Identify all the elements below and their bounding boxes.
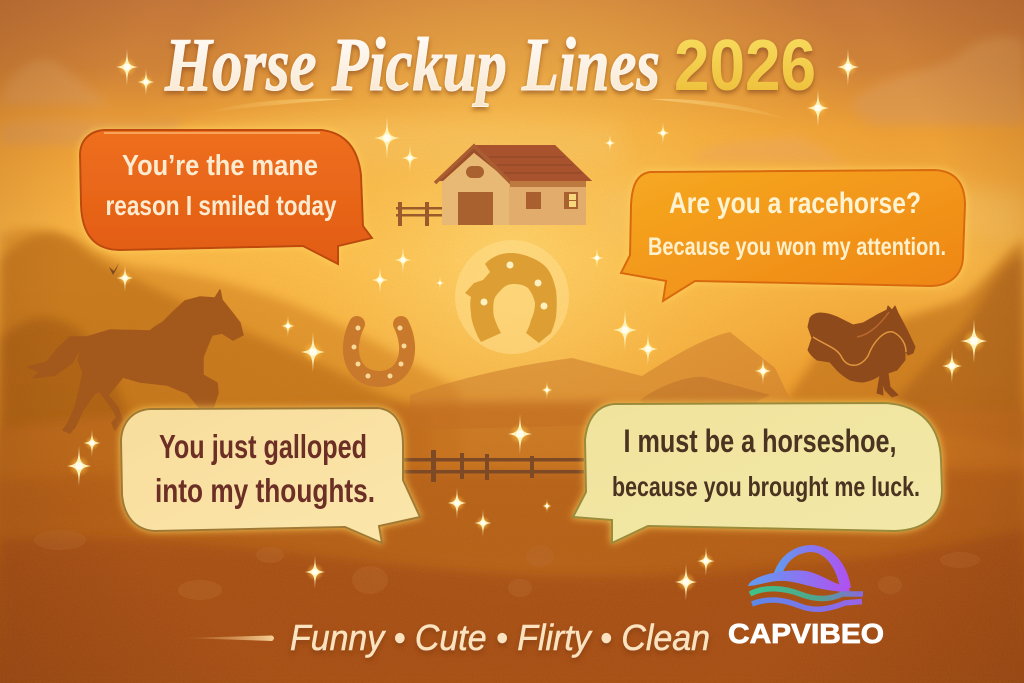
- distant hills: [0, 228, 1024, 520]
- speech bubble: galloped: [121, 408, 420, 543]
- speech bubble: racehorse: [621, 170, 965, 301]
- icon: large horseshoe with halo: [455, 240, 569, 354]
- icon: running horse silhouette: [28, 290, 243, 433]
- barn fence: [396, 202, 443, 226]
- speech bubble: galloped: into my thoughts.: [155, 472, 375, 509]
- logo: CAPVIBEO: [728, 545, 884, 649]
- sparkles: [67, 48, 988, 601]
- speech bubble: galloped: You just galloped: [159, 428, 367, 465]
- barn with fence: [396, 145, 592, 226]
- title swoosh left: [201, 99, 345, 114]
- meadow fence: [404, 450, 584, 482]
- speech bubble: mane: reason I smiled today: [106, 190, 337, 221]
- speech bubble: horseshoe: I must be a horseshoe,: [624, 423, 896, 459]
- meadow bands: [0, 402, 1024, 683]
- speech bubble: mane: You’re the mane: [122, 150, 318, 182]
- icon: small bird: [109, 263, 119, 275]
- speech bubble: horseshoe: [573, 403, 942, 543]
- speech bubble: racehorse: Because you won my attention.: [648, 233, 946, 261]
- title swoosh right: [650, 99, 782, 118]
- title: 2026: [674, 26, 816, 106]
- logo icon: [748, 545, 863, 609]
- icon: small horseshoe: [351, 324, 407, 379]
- speech bubble: horseshoe: because you brought me luck.: [612, 471, 920, 502]
- clouds: [0, 37, 1024, 240]
- icon: saddled horse silhouette: [808, 306, 915, 397]
- logo: CAPVIBEO: CAPVIBEO: [728, 618, 884, 649]
- title: Horse Pickup Lines: [164, 23, 660, 107]
- speech bubble: racehorse: Are you a racehorse?: [669, 187, 921, 220]
- tagline with line: Funny • Cute • Flirty • Clean: [290, 617, 710, 658]
- mountains: [410, 332, 800, 430]
- speech bubble: mane: [80, 130, 372, 264]
